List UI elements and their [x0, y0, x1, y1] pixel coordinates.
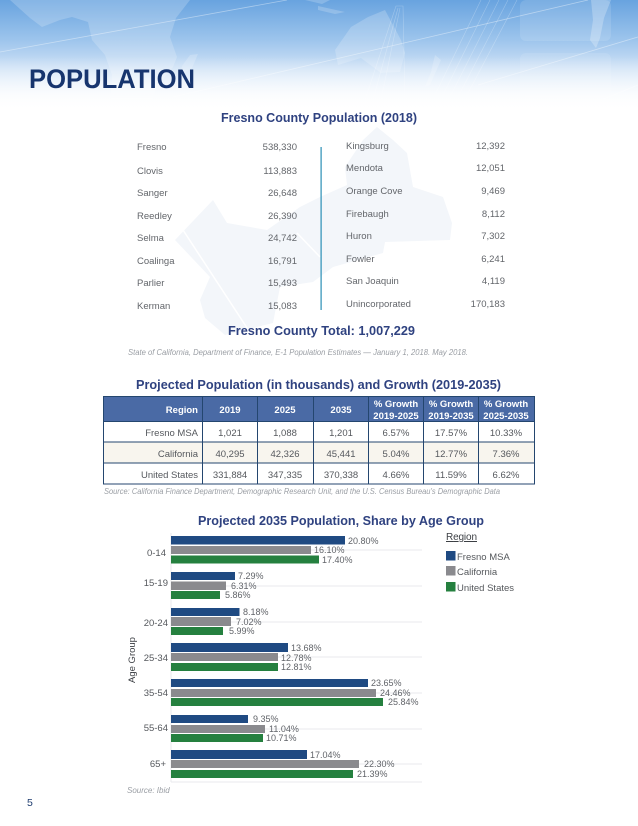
table row: United States: 6.62%: [493, 470, 520, 481]
table header: 2019-2025: [373, 411, 419, 422]
population list: right column: Kingsburg: [346, 141, 389, 152]
population list: right column: 6,241: [481, 254, 505, 265]
source note: chart: Source: Ibid: [127, 786, 170, 795]
table row: California: 42,326: [270, 449, 300, 460]
population list: left column: 538,330: [263, 142, 297, 153]
table row: United States: 11.59%: [435, 470, 467, 481]
table row: Fresno MSA: 6.57%: [383, 428, 410, 439]
bars: 35-54: [171, 678, 419, 707]
bars: 0-14: 20.80%: [348, 536, 379, 546]
table row: Fresno MSA: 17.57%: [435, 428, 468, 439]
bars: 65+: [171, 750, 395, 779]
population list: left column: [137, 142, 297, 312]
age groups axis labels: [144, 548, 168, 770]
table row: Fresno MSA: 1,201: [329, 428, 353, 439]
table header: 2019: [219, 405, 241, 416]
population list: right column: [346, 141, 505, 310]
table row: United States: 370,338: [324, 470, 358, 481]
bar chart: share by age group: [127, 533, 422, 782]
table row: California: [158, 449, 520, 460]
population list: right column: 4,119: [482, 276, 505, 287]
table row: California: 7.36%: [493, 449, 520, 460]
table header: 2025-2035: [483, 411, 529, 422]
bars: 25-34: 12.81%: [281, 662, 312, 672]
bars: 15-19: 7.29%: [238, 571, 264, 581]
bars: 25-34: 12.78%: [281, 653, 312, 663]
table row: United States: 4.66%: [383, 470, 410, 481]
bars: 35-54: 23.65%: [371, 678, 402, 688]
column divider: [320, 147, 322, 310]
table header: % Growth: [374, 399, 418, 410]
population list: right column: San Joaquin: [346, 276, 399, 287]
bars: 15-19: [171, 571, 264, 600]
legend: Fresno MSA: [457, 552, 510, 563]
table row: California: 45,441: [326, 449, 356, 460]
table header: [166, 399, 529, 422]
bars: 20-24: [171, 607, 269, 636]
bars: 55-64: [171, 714, 299, 743]
bars: 55-64: 10.71%: [266, 733, 297, 743]
population list: left column: 24,742: [268, 233, 297, 244]
table row: United States: 347,335: [268, 470, 302, 481]
source note: population: State of California, Department of Finance, E-1 Population Estimates — January 1, 2018. May 2018.: [128, 348, 468, 357]
table: projected population and growth: [104, 396, 534, 484]
population list: left column: 16,791: [268, 256, 297, 267]
bars: 0-14: 17.40%: [322, 555, 353, 565]
population list: right column: 12,051: [476, 163, 505, 174]
bars: 35-54: 24.46%: [380, 688, 411, 698]
page number: 5: [27, 797, 33, 809]
bars: 55-64: 9.35%: [253, 714, 279, 724]
population list: left column: Clovis: [137, 166, 163, 177]
age groups axis labels: 55-64: [144, 723, 168, 734]
bars: 55-64: 11.04%: [269, 724, 299, 734]
population list: left column: 113,883: [263, 166, 297, 177]
background map of Fresno County: [175, 127, 452, 337]
population list: right column: Huron: [346, 231, 372, 242]
table row: California: 5.04%: [383, 449, 410, 460]
population list: right column: Mendota: [346, 163, 384, 174]
table header: % Growth: [429, 399, 473, 410]
population list: left column: 26,648: [268, 188, 297, 199]
population list: left column: Selma: [137, 233, 165, 244]
population list: right column: Firebaugh: [346, 209, 389, 220]
legend: United States: [457, 583, 514, 594]
header background with world map: [0, 0, 638, 112]
table row: United States: [141, 470, 520, 481]
population list: left column: Kerman: [137, 301, 170, 312]
population list: right column: 8,112: [482, 209, 505, 220]
population list: right column: Orange Cove: [346, 186, 403, 197]
population list: right column: Fowler: [346, 254, 375, 265]
age groups axis labels: 20-24: [144, 618, 168, 629]
age groups axis labels: 0-14: [147, 548, 166, 559]
age groups axis labels: 15-19: [144, 578, 168, 589]
population list: left column: Fresno: [137, 142, 167, 153]
title: POPULATION: [29, 64, 195, 94]
heading: age group chart: Projected 2035 Population, Share by Age Group: [198, 513, 484, 528]
table row: Fresno MSA: [145, 428, 523, 439]
table header: 2025: [274, 405, 296, 416]
population list: right column: 12,392: [476, 141, 505, 152]
bars: 35-54: 25.84%: [388, 697, 419, 707]
age groups axis labels: 35-54: [144, 688, 168, 699]
table row: California: California: [158, 449, 199, 460]
bars: 20-24: 7.02%: [236, 617, 262, 627]
age groups axis labels: 65+: [150, 759, 166, 770]
population list: right column: Unincorporated: [346, 299, 411, 310]
axis title: Age Group: [127, 637, 138, 683]
table row: California: 12.77%: [435, 449, 468, 460]
population list: left column: Reedley: [137, 211, 172, 222]
table header: % Growth: [484, 399, 528, 410]
table row: United States: United States: [141, 470, 198, 481]
table row: United States: 331,884: [213, 470, 247, 481]
bars: 25-34: [171, 643, 322, 672]
population list: right column: 7,302: [481, 231, 505, 242]
table row: Fresno MSA: 1,088: [273, 428, 297, 439]
table header: 2035: [330, 405, 352, 416]
population list: left column: Coalinga: [137, 256, 175, 267]
population list: left column: Parlier: [137, 278, 164, 289]
table row: Fresno MSA: Fresno MSA: [145, 428, 199, 439]
table row: Fresno MSA: 1,021: [218, 428, 242, 439]
legend: [446, 532, 514, 594]
bars: 65+: 17.04%: [310, 750, 341, 760]
heading: Fresno County Population: Fresno County Population (2018): [221, 110, 417, 125]
population list: left column: Sanger: [137, 188, 168, 199]
table row: California: 40,295: [215, 449, 245, 460]
legend: Region: [446, 532, 477, 543]
population list: right column: 9,469: [481, 186, 505, 197]
table header: 2019-2035: [428, 411, 474, 422]
county total: Fresno County Total: 1,007,229: [228, 323, 415, 338]
population list: left column: 26,390: [268, 211, 297, 222]
bars: 15-19: 5.86%: [225, 590, 251, 600]
population list: left column: 15,493: [268, 278, 297, 289]
population list: left column: 15,083: [268, 301, 297, 312]
population list: right column: 170,183: [471, 299, 505, 310]
table row: Fresno MSA: 10.33%: [490, 428, 523, 439]
age groups axis labels: 25-34: [144, 653, 168, 664]
bars: 20-24: 8.18%: [243, 607, 269, 617]
bars: 65+: 22.30%: [364, 759, 395, 769]
table header: Region: [166, 405, 198, 416]
bars: 0-14: 16.10%: [314, 545, 345, 555]
bars: 15-19: 6.31%: [231, 581, 257, 591]
legend: California: [457, 567, 498, 578]
bars: 65+: 21.39%: [357, 769, 388, 779]
source note: table: Source: California Finance Department, Demographic Research Unit, and the U.S. Census Bureau's Demographic Data: [104, 487, 501, 496]
bars: 20-24: 5.99%: [229, 626, 255, 636]
heading: projected population: Projected Population (in thousands) and Growth (2019-2035): [136, 377, 501, 392]
bars: 25-34: 13.68%: [291, 643, 322, 653]
bars: 0-14: [171, 536, 379, 565]
